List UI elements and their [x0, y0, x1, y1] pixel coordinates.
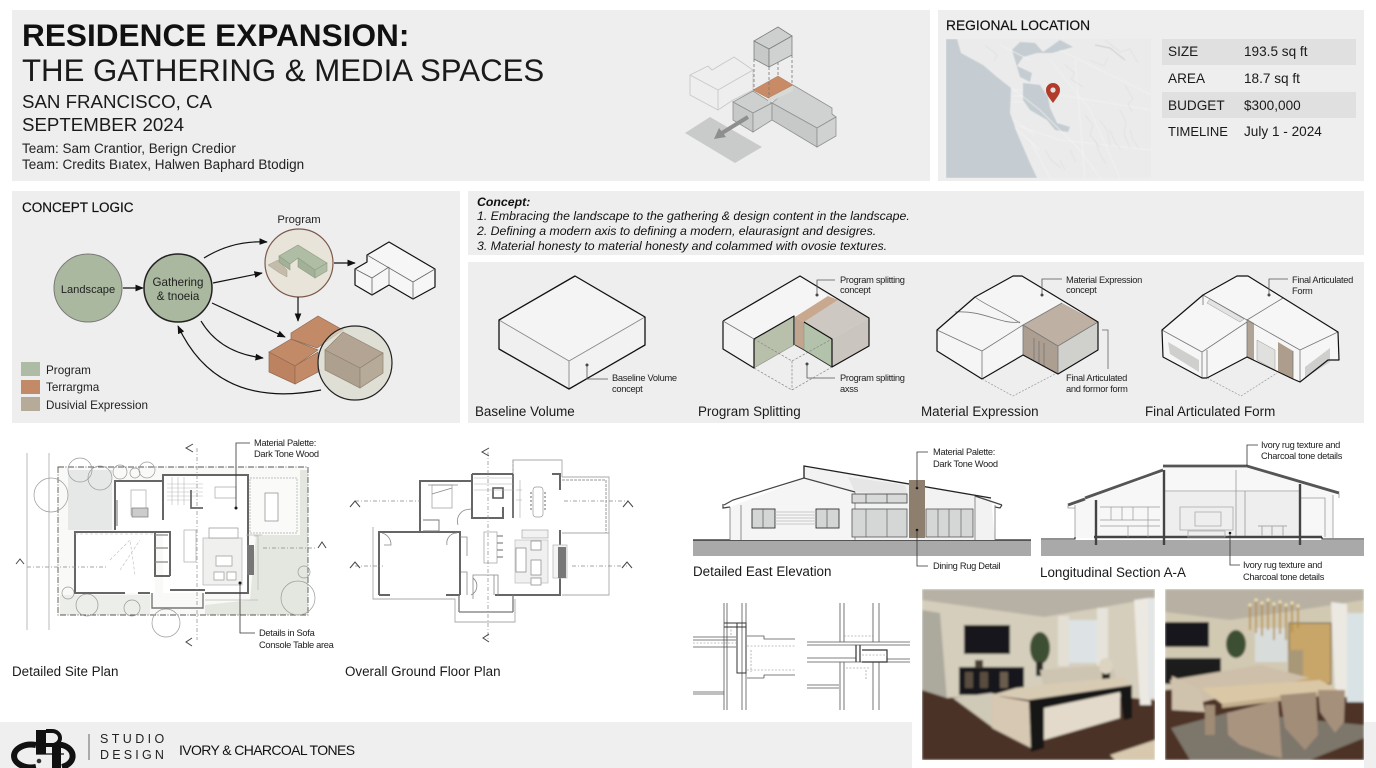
team credits: Team: Sam Crantior, Berign Credior — [22, 141, 236, 156]
panel: header — [12, 10, 930, 181]
data table: BUDGET — [1168, 98, 1225, 113]
photo: living room — [922, 589, 1155, 760]
drawing: longitudinal section — [1040, 440, 1364, 582]
panel: concept logic — [12, 191, 460, 423]
callout: elevation material palette: Dining Rug Detail — [933, 561, 1000, 571]
heading: regional location: REGIONAL LOCATION — [946, 18, 1090, 33]
data table: 18.7 sq ft — [1244, 71, 1300, 86]
diagram: program splitting: Program splitting — [840, 275, 905, 285]
studio name: STUDIO — [100, 732, 168, 746]
data table: AREA — [1168, 71, 1206, 86]
diagram: baseline volume: Baseline Volume — [475, 404, 575, 419]
white massing model — [355, 242, 435, 299]
callout: elevation material palette: Material Palette: — [933, 447, 995, 457]
terracotta massing with lens — [269, 316, 392, 400]
diagram: program splitting: Program Splitting — [698, 404, 801, 419]
map — [946, 39, 1151, 178]
data table: SIZE — [1168, 44, 1198, 59]
drawing: overall ground floor plan — [345, 448, 633, 679]
node: gathering: & tnoeia — [157, 290, 200, 303]
title: THE GATHERING & MEDIA SPACES — [22, 53, 544, 88]
diagram: program splitting: Program splitting — [840, 373, 905, 383]
callout: sofa console details: Console Table area — [259, 640, 335, 650]
location and date — [22, 91, 213, 135]
data table: 193.5 sq ft — [1244, 44, 1308, 59]
diagram: final articulated form: Form — [1292, 286, 1313, 296]
drawing: detailed site plan — [12, 438, 335, 679]
arrows: concept flow — [123, 242, 355, 394]
team credits: Team: Credits Bıatex, Halwen Baphard Btodign — [22, 157, 304, 172]
diagram: material expression: Final Articulated — [1066, 373, 1127, 383]
diagram: baseline volume — [475, 276, 677, 419]
studio name: DESIGN — [100, 748, 167, 762]
data table: TIMELINE — [1168, 124, 1228, 139]
data table: $300,000 — [1244, 98, 1301, 113]
callout: elevation material palette: Dark Tone Wood — [933, 459, 998, 469]
diagram: program splitting: concept — [840, 285, 871, 295]
legend — [21, 362, 148, 412]
icon: studio logo — [14, 730, 73, 768]
diagram: baseline volume: concept — [612, 384, 643, 394]
construction detail 2 — [807, 603, 910, 710]
panel: massing evolution — [468, 262, 1364, 423]
diagram: material expression: concept — [1066, 285, 1097, 295]
footer bar — [0, 580, 1376, 768]
construction detail 1 — [693, 603, 795, 710]
callout: material palette: Dark Tone Wood — [254, 449, 319, 459]
legend: Dusivial Expression — [46, 399, 148, 412]
diagram: material expression: Material Expression — [921, 404, 1039, 419]
diagram: material expression — [921, 275, 1142, 419]
callout: section bottom: Charcoal tone details — [1243, 572, 1325, 582]
callout: section top: Charcoal tone details — [1261, 451, 1343, 461]
panel: concept statement: 3. Material honesty to material honesty and colammed with ovosie textures. — [477, 239, 887, 253]
callout: sofa console details — [238, 582, 335, 650]
drawing: overall ground floor plan: Overall Ground Floor Plan — [345, 664, 501, 679]
diagram: material expression: Material Expression — [1066, 275, 1142, 285]
panel: concept statement: Concept: — [477, 195, 530, 209]
node: gathering: Gathering — [153, 276, 203, 289]
node: landscape — [54, 254, 122, 322]
callout: section bottom — [1229, 532, 1325, 582]
panel: concept statement — [468, 191, 1364, 255]
location and date: SEPTEMBER 2024 — [22, 114, 184, 135]
callout: section bottom: Ivory rug texture and — [1243, 560, 1322, 570]
node: program — [265, 214, 333, 297]
data table: July 1 - 2024 — [1244, 124, 1322, 139]
location and date: SAN FRANCISCO, CA — [22, 91, 213, 112]
heading: concept logic: CONCEPT LOGIC — [22, 200, 134, 215]
legend: Program — [46, 364, 91, 377]
legend: Terrargma — [46, 381, 100, 394]
panel: regional location — [938, 10, 1364, 181]
photo: dining room — [1165, 589, 1364, 760]
diagram: final articulated form: Final Articulated — [1292, 275, 1353, 285]
callout: material palette — [234, 438, 319, 510]
drawing: detailed site plan: Detailed Site Plan — [12, 664, 118, 679]
diagram: final articulated form — [1145, 275, 1353, 419]
data table — [1162, 39, 1356, 139]
drawing: east elevation — [693, 447, 1031, 579]
callout: section top: Ivory rug texture and — [1261, 440, 1340, 450]
title — [22, 17, 544, 88]
diagram: program splitting: axss — [840, 384, 859, 394]
panel: concept statement: 1. Embracing the landscape to the gathering & design content in the landscape. — [477, 209, 910, 223]
callout: material palette: Material Palette: — [254, 438, 316, 448]
node: program: Program — [277, 214, 321, 226]
diagram: program splitting — [698, 275, 905, 419]
drawing: east elevation: Detailed East Elevation — [693, 564, 831, 579]
node: landscape: Landscape — [61, 284, 115, 296]
team credits — [22, 141, 304, 172]
drawing: longitudinal section: Longitudinal Section A-A — [1040, 565, 1186, 580]
isometric massing diagram — [685, 27, 836, 163]
diagram: material expression: and formor form — [1066, 384, 1128, 394]
callout: section top — [1247, 440, 1343, 466]
icon: map pin — [1046, 83, 1060, 103]
panel: concept statement: 2. Defining a modern axis to defining a modern, elaurasignt and desigres. — [476, 224, 876, 238]
diagram: final articulated form: Final Articulated Form — [1145, 404, 1275, 419]
footer tagline: IVORY & CHARCOAL TONES — [179, 742, 355, 758]
callout: elevation material palette — [916, 447, 1000, 571]
studio name — [100, 732, 168, 762]
title: RESIDENCE EXPANSION: — [22, 17, 409, 53]
diagram: baseline volume: Baseline Volume — [612, 373, 677, 383]
node: gathering — [144, 254, 212, 322]
callout: sofa console details: Details in Sofa — [259, 628, 316, 638]
